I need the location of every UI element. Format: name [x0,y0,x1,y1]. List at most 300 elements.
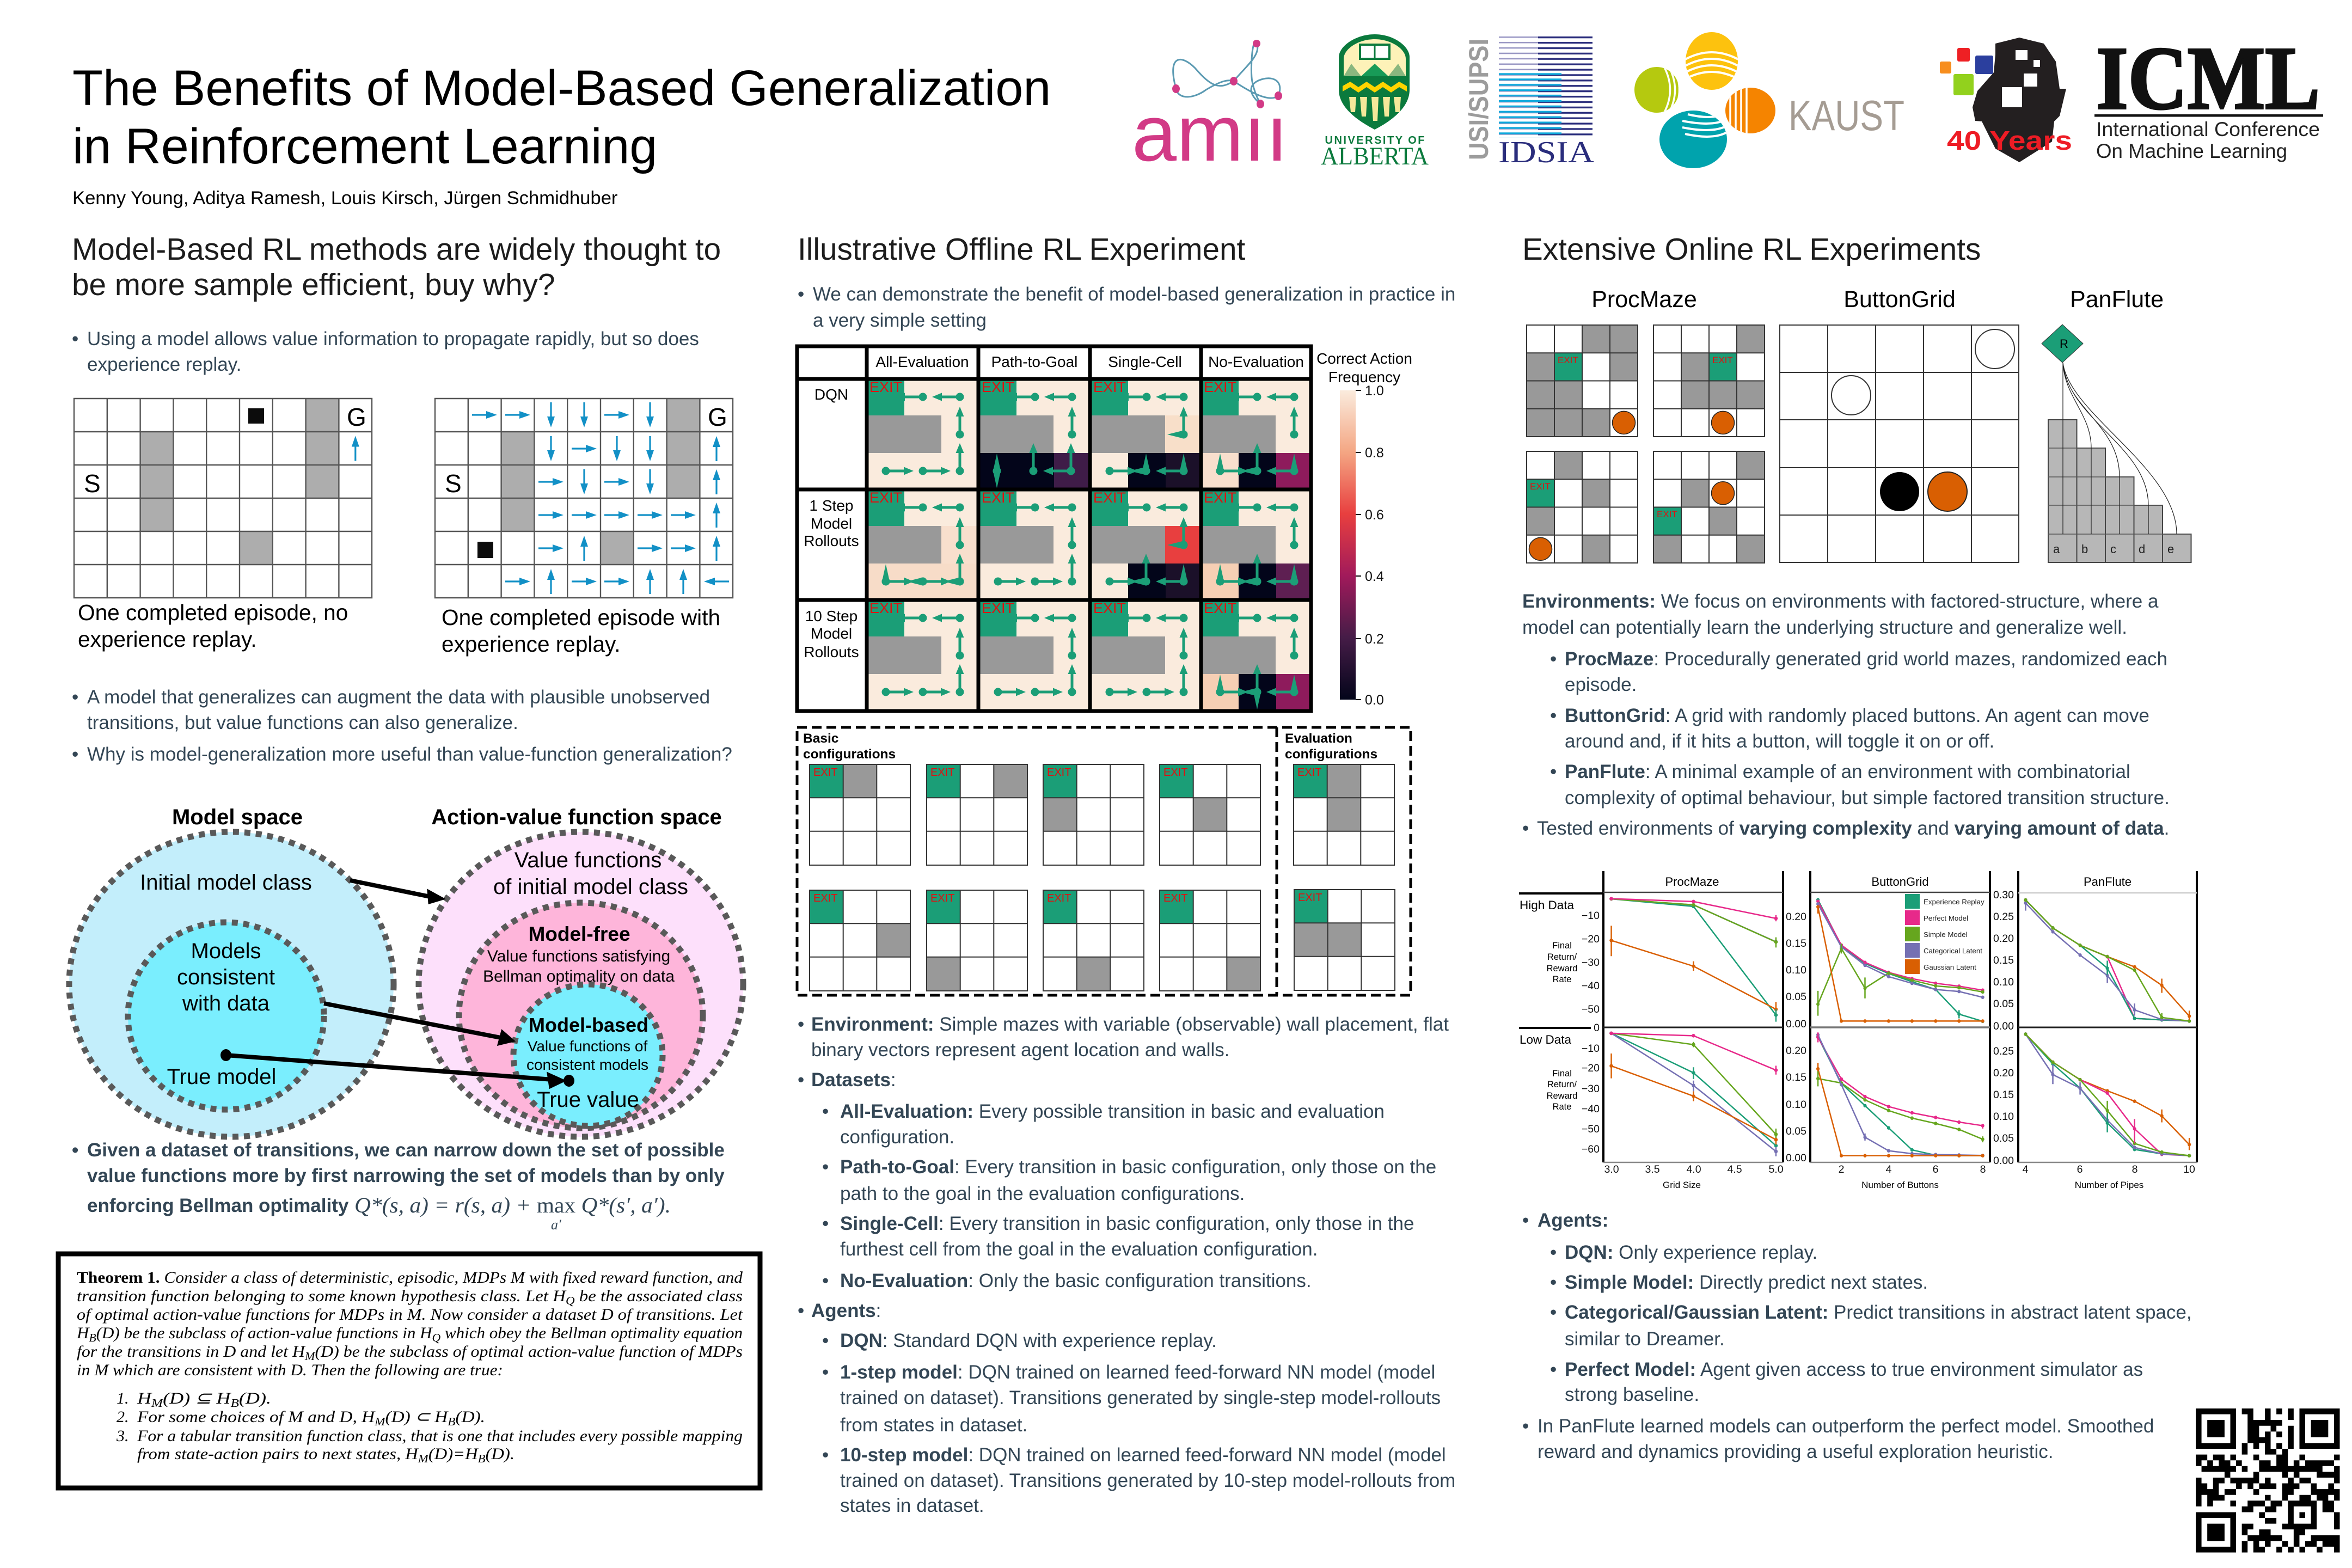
heading: model-based RL: be more sample efficient, buy why? [72,268,555,302]
chart: ProcMaze high and low data: −30 [1582,957,1600,969]
text block: environments: • [1550,648,1557,670]
colorbar: Correct Action [1316,350,1412,367]
theorem box: in M which are consistent with D. Then the following are true: [77,1361,503,1379]
logo: KAUST [1634,32,1904,168]
text block: environments: ProcMaze: Procedurally generated grid world mazes, randomized each [1565,648,2167,670]
text block: agents: 10-step model: DQN trained on learned feed-forward NN model (model [840,1444,1446,1466]
gridworld: no replay: G [347,403,366,431]
chart: PanFlute high and low data: 0.10 [1993,1111,2014,1123]
text block: environments: Tested environments of varying complexity and varying amount of data. [1537,818,2169,839]
logo: University of Alberta [1321,34,1429,170]
text block: agents: trained on dataset). Transitions generated by 10-step model-rollouts from [840,1470,1455,1491]
text block: bellman statement [72,1140,725,1233]
chart titles: ButtonGrid [1871,875,1929,889]
grids: evaluation configurations: EXIT [1298,892,1322,904]
panels: DQN row [868,379,1312,488]
panels: DQN row: EXIT [982,379,1014,395]
theorem box: M [418,1452,429,1465]
text block: agents and panflute note: reward and dynamics providing a useful exploration heuristic. [1538,1441,2053,1462]
row labels: Return/ [1547,1080,1577,1089]
gridworld: with replay: G [708,403,727,431]
chart titles: ProcMaze [1665,875,1719,889]
chart: PanFlute high and low data: 0.20 [1993,1067,2014,1079]
text block: environment and datasets: furthest cell from the goal in the evaluation configuration. [840,1239,1318,1260]
panel: middle column [797,232,1455,1516]
colorbar: 0.2 [1365,632,1384,647]
venn diagram: model and value spaces [69,805,743,1137]
chart: ProcMaze high and low data [1582,899,1784,1190]
chart: ButtonGrid high and low data: 0.05 [1786,991,1806,1003]
text block: bellman statement: a′ [551,1217,561,1233]
chart: ButtonGrid high and low data [1786,900,1986,1190]
theorem box: (D). [486,1445,514,1463]
grids: basic configurations: EXIT [1163,892,1187,904]
grids: basic configurations: EXIT [930,767,954,779]
row labels [1519,893,1603,1112]
labels: evaluation configurations: Evaluation [1285,731,1352,746]
chart: ProcMaze high and low data: 4.0 [1686,1163,1701,1175]
heading: illustrative offline RL experiment: Illustrative Offline RL Experiment [798,232,1246,267]
theorem box: B [448,1415,456,1428]
venn labels: Model-free [528,923,630,945]
logo: ICML 40 years: On Machine Learning [2096,140,2287,162]
panels: 10 step row [868,600,1312,709]
grids: evaluation configurations: EXIT [1297,767,1321,779]
column headers: No-Evaluation [1208,353,1304,370]
chart legend: Perfect Model [1924,914,1968,922]
diagram: ProcMaze [1527,325,1765,563]
diagram: PanFlute: a [2053,542,2060,556]
chart: ProcMaze high and low data: 5.0 [1768,1163,1784,1175]
diagram: PanFlute: e [2167,542,2174,556]
colorbar: 0.6 [1365,507,1384,523]
text block: agents and panflute note [1522,1210,2192,1462]
row labels: Rate [1553,1102,1571,1112]
text block: replay bullet: • [72,328,78,350]
panels: 1 step row: EXIT [869,489,902,506]
text block: agents and panflute note: strong baseline. [1565,1384,1699,1405]
set: models consistent with data [128,922,324,1110]
text block: environments: PanFlute: A minimal example of an environment with combinatorial [1565,761,2130,782]
gridworld: with replay [435,399,733,598]
text block: agents: • [822,1444,829,1466]
theorem box: Theorem 1. Consider a class of deterministic, episodic, MDPs M with fixed reward function, and [77,1269,743,1287]
logo: University of Alberta: UNIVERSITY OF [1325,134,1424,146]
gridworld: with replay: S [445,469,462,498]
venn labels: Initial model class [140,871,312,895]
chart: PanFlute high and low data: 0.15 [1993,1089,2014,1101]
chart frames [1603,871,2197,1162]
chart: PanFlute high and low data: 0.25 [1993,911,2014,923]
text block: bellman statement: Q*(s, a) = r(s, a) + max Q*(s′, a′). [354,1193,671,1217]
configuration diagrams [797,727,1411,995]
text block: environments: model can potentially learn the underlying structure and generalize well. [1522,617,2127,638]
labels: basic configurations: configurations [803,747,896,762]
caption: with replay: One completed episode with [442,605,720,630]
text block: replay bullet [72,328,699,375]
chart: PanFlute high and low data: 0.00 [1993,1020,2014,1032]
set: model-free [459,903,703,1128]
theorem box: 2. [117,1408,128,1426]
logo: USI/SUPSI IDSIA [1463,36,1595,169]
text block: environment and datasets: • [798,1014,804,1035]
chart: PanFlute high and low data: 0.30 [1993,889,2014,901]
chart: PanFlute high and low data [1993,889,2195,1190]
logo: ICML 40 years: 40 Years [1947,126,2072,156]
colorbar [1316,350,1412,708]
text block: environments: Environments: We focus on environments with factored-structure, where a [1522,591,2159,612]
panels: 1 step row: EXIT [982,489,1014,506]
title [72,60,1051,174]
theorem box: M [374,1415,386,1428]
text block: generalization bullets: Why is model-generalization more useful than value-function generalization? [87,744,732,765]
set: initial model class [69,832,394,1137]
grids: evaluation configurations [1294,764,1395,990]
logos [1132,28,2323,177]
chart legend: Simple Model [1924,930,1968,939]
text block: environments: complexity of optimal behaviour, but simple factored transition structure. [1565,787,2170,808]
column headers: All-Evaluation [875,353,969,370]
text block: environment and datasets: Single-Cell: Every transition in basic configuration, only those in the [840,1213,1414,1234]
theorem box: (D) be the subclass of optimal action-value function of MDPs [315,1343,743,1361]
venn labels: True value [537,1088,639,1112]
chart: ProcMaze high and low data: −10 [1582,1043,1600,1055]
chart: ButtonGrid high and low data: 0.20 [1786,911,1806,923]
row labels: 1 Step [810,497,853,514]
environment titles: PanFlute [2070,286,2164,313]
chart: ProcMaze high and low data: 4.5 [1727,1163,1742,1175]
theorem box: transition function belonging to some known hypothesis class. Let H [77,1287,523,1305]
text block: agents and panflute note: Simple Model: Directly predict next states. [1565,1272,1928,1293]
row labels: Rate [1553,975,1571,984]
logo: ICML 40 years: International Conference [2096,118,2320,140]
venn labels: Model-based [529,1014,648,1036]
text block: agents and panflute note: Categorical/Gaussian Latent: Predict transitions in abstract latent space, [1565,1302,2192,1323]
text block: agents: • [822,1330,829,1351]
logo: ICML 40 years: ICML [2096,28,2320,128]
venn labels: consistent models [526,1056,648,1073]
column headers: Single-Cell [1108,353,1182,370]
panels: DQN row: EXIT [1093,379,1126,395]
row labels [804,386,859,660]
theorem box: B [230,1396,239,1410]
grids: basic configurations: EXIT [1163,767,1187,779]
chart: PanFlute high and low data: 8 [2132,1163,2137,1175]
dashed frames [797,727,1411,995]
grids: basic configurations: EXIT [813,767,837,779]
text block: agents [798,1300,1455,1516]
text block: bellman statement: Given a dataset of transitions, we can narrow down the set of possible [87,1140,725,1161]
text block: environments: • [1550,705,1557,726]
chart: PanFlute high and low data: 0.10 [1993,976,2014,988]
venn labels: with data [182,991,270,1015]
chart: ButtonGrid high and low data: 0.10 [1786,964,1806,976]
chart: ProcMaze high and low data: −50 [1582,1123,1600,1135]
panels: 10 step row: EXIT [869,600,902,616]
text block: agents: • [798,1300,804,1321]
text block: environments: ButtonGrid: A grid with randomly placed buttons. An agent can move [1565,705,2149,726]
chart: ProcMaze high and low data: 3.0 [1604,1163,1619,1175]
theorem box: 1. [117,1389,128,1407]
title: The Benefits of Model-Based Generalization [72,60,1051,116]
heading: model-based RL [72,232,721,302]
venn labels [140,848,688,1112]
environment titles [1591,286,2164,313]
diagram: PanFlute [2042,324,2191,562]
theorem box: Q [566,1294,575,1307]
colorbar: 1.0 [1365,383,1384,399]
colorbar: Frequency [1328,369,1400,385]
title: in Reinforcement Learning [72,119,657,174]
authors: Kenny Young, Aditya Ramesh, Louis Kirsch, Jürgen Schmidhuber [72,188,617,209]
diagram: ProcMaze: EXIT [1657,509,1677,519]
heading: model-based RL: Model-Based RL methods are widely thought to [72,232,721,267]
text block: intro bullet [798,284,1455,331]
heading: model space: Model space [172,805,303,829]
theorem box: be the associated class [575,1287,743,1305]
chart: ButtonGrid high and low data: 0.15 [1786,938,1806,950]
diagram: PanFlute: b [2081,542,2088,556]
row labels: Low Data [1520,1033,1572,1046]
panels: 1 step row: EXIT [1204,489,1236,506]
text block: environment and datasets: No-Evaluation: Only the basic configuration transitions. [840,1270,1312,1291]
row labels: Rollouts [804,644,859,660]
diagram: ProcMaze: EXIT [1530,481,1551,492]
text block: environment and datasets: configuration. [840,1126,954,1148]
text block: replay bullet: Using a model allows value information to propagate rapidly, but so does [87,328,699,350]
arrow: consistent models to model-based [324,1003,514,1045]
chart: ProcMaze high and low data: −60 [1582,1143,1600,1155]
chart: PanFlute high and low data: 0.15 [1993,954,2014,966]
chart: PanFlute high and low data: 0.20 [1993,933,2014,945]
chart: ProcMaze high and low data: 3.5 [1645,1163,1660,1175]
venn labels: Value functions [514,848,661,872]
text block: environment and datasets: • [798,1069,804,1091]
panels: 10 step row: EXIT [982,600,1014,616]
labels: evaluation configurations [1285,731,1377,762]
text block: generalization bullets: A model that generalizes can augment the data with plausible unobserved [87,687,710,708]
row labels: Rollouts [804,532,859,549]
theorem box: (D). [239,1389,271,1407]
grids: basic configurations: EXIT [813,892,837,904]
chart legend: Experience Replay [1924,898,1984,906]
chart: ProcMaze high and low data: −40 [1582,980,1600,992]
chart: ButtonGrid high and low data: 0.00 [1786,1018,1806,1030]
panels: DQN row: EXIT [1204,379,1236,395]
arrow: true model to true value [220,1049,574,1088]
chart: ButtonGrid high and low data: 2 [1839,1163,1844,1175]
diagram: ButtonGrid [1780,325,2019,562]
chart: PanFlute high and low data: 0.25 [1993,1045,2014,1057]
venn labels: of initial model class [493,875,688,899]
theorem box: B [89,1331,96,1344]
text block: bellman statement: • [72,1140,78,1161]
set: value functions of initial model class [419,832,743,1137]
chart: ButtonGrid high and low data: Number of Buttons [1861,1180,1939,1190]
caption: no replay [78,600,348,652]
environment titles: ProcMaze [1591,286,1697,313]
panels: 10 step row: EXIT [1093,600,1126,616]
diagram: PanFlute: R [2060,337,2068,351]
venn labels: Models [191,939,261,963]
labels: basic configurations: Basic [803,731,838,746]
text block: agents and panflute note: • [1550,1242,1557,1263]
caption: no replay: experience replay. [78,627,257,652]
grids: basic configurations: EXIT [1047,767,1071,779]
text block: agents and panflute note: Agents: [1538,1210,1608,1231]
panel: right column [1519,232,2340,1553]
chart: PanFlute high and low data: 0.00 [1993,1155,2014,1167]
theorem box: H [77,1324,89,1342]
chart: ButtonGrid high and low data: 8 [1980,1163,1986,1175]
text block: agents and panflute note: • [1522,1416,1529,1437]
theorem box: For some choices of M and D, H [137,1408,351,1426]
chart legend [1905,894,1984,974]
logo: USI/SUPSI IDSIA: IDSIA [1498,136,1595,169]
text block: environment and datasets: path to the goal in the evaluation configurations. [840,1183,1245,1204]
labels: evaluation configurations: configurations [1285,747,1377,762]
labels: basic configurations [803,731,896,762]
text block: environments: • [1550,761,1557,782]
arrow: model class to value functions [350,880,444,903]
chart legend: Gaussian Latent [1924,963,1976,971]
logo: amii: amıı [1132,89,1288,177]
chart: ProcMaze high and low data: −20 [1582,1062,1600,1074]
text block: environment and datasets: binary vectors represent agent location and walls. [811,1039,1229,1061]
panels: 10 step row: EXIT [1204,600,1236,616]
text block: environment and datasets: • [822,1213,829,1234]
venn labels: Value functions satisfying [487,947,670,965]
text block: environment and datasets: Datasets: [811,1069,896,1091]
text block: agents: DQN: Standard DQN with experience replay. [840,1330,1217,1351]
theorem box: (D) be the subclass of action-value functions in H [96,1324,433,1342]
text block: agents: Agents: [811,1300,881,1321]
venn labels: consistent [177,965,275,989]
row labels: 10 Step [805,608,857,624]
text block: intro bullet: • [798,284,804,305]
chart: ProcMaze high and low data: −50 [1582,1003,1600,1015]
text block: environment and datasets: • [822,1270,829,1291]
row labels: Model [811,515,852,532]
panels: 1 step row: EXIT [1093,489,1126,506]
text block: environment and datasets: All-Evaluation: Every possible transition in basic and evaluation [840,1101,1385,1122]
text block: bellman statement: value functions more by first narrowing the set of models than by only [87,1165,725,1186]
text block: agents and panflute note: DQN: Only experience replay. [1565,1242,1817,1263]
chart: PanFlute high and low data: 10 [2183,1163,2195,1175]
chart: ButtonGrid high and low data: 6 [1933,1163,1938,1175]
diagram: ProcMaze: EXIT [1558,355,1578,365]
row labels: DQN [814,386,848,403]
gridworld: no replay: S [84,469,101,498]
logo: USI/SUPSI IDSIA: USI/SUPSI [1463,39,1494,160]
chart: PanFlute high and low data: 0.05 [1993,1132,2014,1144]
panels: 1 step row [868,489,1312,599]
heading: action-value function space: Action-value function space [431,805,722,829]
gridworld: no replay [74,399,372,598]
chart: ProcMaze high and low data: −40 [1582,1103,1600,1115]
text block: agents and panflute note: • [1550,1302,1557,1323]
text block: intro bullet: We can demonstrate the benefit of model-based generalization in practice in [813,284,1455,305]
chart: ProcMaze high and low data: −30 [1582,1083,1600,1095]
line charts [1519,871,2197,1190]
text block: environment and datasets [798,1014,1449,1291]
colorbar: 0.0 [1365,693,1384,708]
text block: agents and panflute note: Perfect Model: Agent given access to true environment simulator as [1565,1359,2143,1380]
text block: environment and datasets: Path-to-Goal: Every transition in basic configuration, only those on the [840,1156,1436,1178]
theorem box: For a tabular transition function class, that is one that includes every possible mapping [137,1427,743,1445]
chart titles [1665,875,2132,889]
grids: basic configurations [810,764,1260,991]
chart: ButtonGrid high and low data: 0.10 [1786,1099,1806,1111]
table frame [797,346,1311,711]
caption: with replay: experience replay. [442,632,621,657]
text block: generalization bullets: • [72,744,78,765]
venn labels: True model [167,1065,276,1089]
caption: with replay [442,605,720,657]
row labels: Final [1552,1069,1572,1079]
text block: agents and panflute note: • [1550,1359,1557,1380]
panel: left column [58,232,760,1488]
chart: ProcMaze high and low data: 0 [1594,1022,1600,1034]
chart titles: PanFlute [2084,875,2132,889]
venn labels: Bellman optimality on data [483,967,675,985]
heading: extensive online RL experiments: Extensive Online RL Experiments [1522,232,1981,267]
text block: replay bullet: experience replay. [87,354,241,375]
text block: environment and datasets: • [822,1101,829,1122]
chart: ButtonGrid high and low data: 0.05 [1786,1125,1806,1137]
logo: University of Alberta: ALBERTA [1321,142,1429,170]
text block: agents and panflute note: In PanFlute learned models can outperform the perfect model. Smoothed [1538,1416,2154,1437]
chart legend: Categorical Latent [1924,947,1982,955]
chart: PanFlute high and low data: 0.05 [1993,998,2014,1010]
text block: environment and datasets: • [822,1156,829,1178]
theorem box: H [137,1389,149,1407]
chart: ButtonGrid high and low data: 0.15 [1786,1071,1806,1083]
chart: PanFlute high and low data: 4 [2023,1163,2029,1175]
venn labels: Value functions of [528,1038,647,1055]
QR code [2196,1408,2340,1553]
text block: agents: 1-step model: DQN trained on learned feed-forward NN model (model [840,1362,1435,1383]
grids: basic configurations: EXIT [1047,892,1071,904]
environment titles: ButtonGrid [1843,286,1956,313]
grids: basic configurations: EXIT [930,892,954,904]
text block: agents and panflute note: similar to Dreamer. [1565,1328,1725,1350]
text block: generalization bullets [72,687,732,765]
text block: agents and panflute note: • [1522,1210,1529,1231]
column headers [875,353,1304,370]
text block: environments: around and, if it hits a button, will toggle it on or off. [1565,731,1994,752]
theorem box: B [478,1452,486,1465]
theorem box: M [304,1350,316,1363]
text block: environments: episode. [1565,674,1637,695]
theorem box [58,1254,760,1488]
chart: ProcMaze high and low data: −10 [1582,910,1600,922]
text block: generalization bullets: • [72,687,78,708]
text block: agents: • [822,1362,829,1383]
theorem box: (D). [455,1408,485,1426]
panels: DQN row: EXIT [869,379,902,395]
colorbar: 0.4 [1365,569,1384,584]
theorem box: 3. [116,1427,128,1445]
logo: amii [1132,40,1288,177]
logo: KAUST: KAUST [1788,91,1904,139]
chart: PanFlute high and low data: Number of Pipes [2075,1180,2143,1190]
theorem box: for the transitions in D and let H [77,1343,291,1361]
row labels: Reward [1547,964,1577,973]
text block: bellman statement: enforcing Bellman optimality [87,1195,349,1216]
colorbar: 0.8 [1365,445,1384,461]
text block: agents: states in dataset. [840,1495,984,1516]
